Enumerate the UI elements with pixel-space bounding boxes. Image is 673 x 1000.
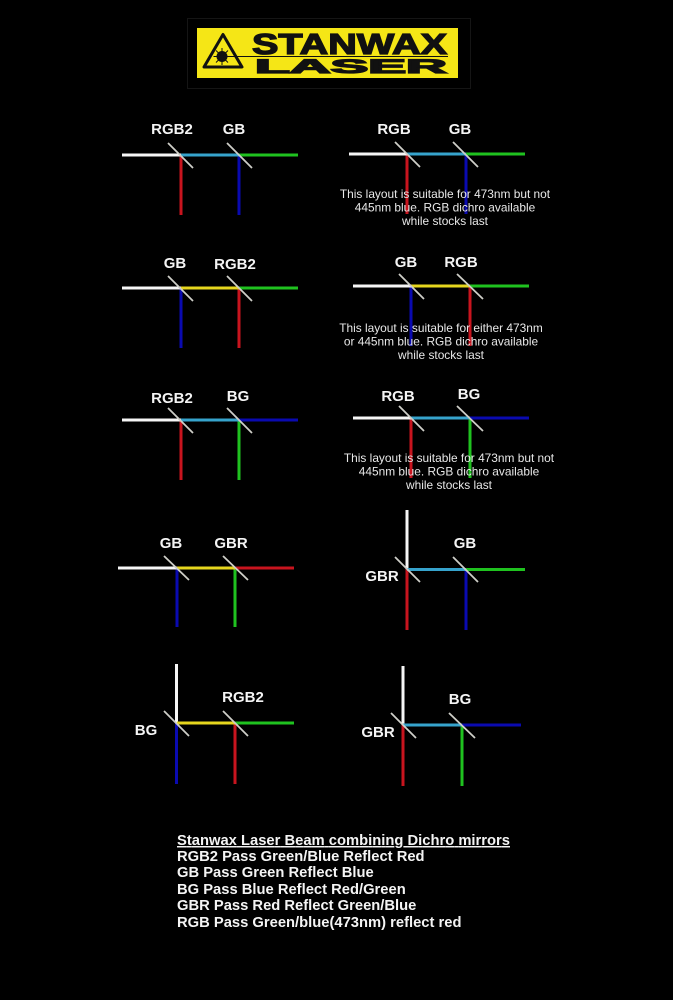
diagram: GB then RGB: RGB (444, 254, 478, 271)
note: 473nm only: This layout is suitable for 473nm but not (344, 451, 554, 465)
diagram: GB then RGB (353, 254, 529, 346)
diagram: GBR with vertical input then GB: GB (454, 535, 476, 552)
diagram: RGB then BG: BG (458, 386, 480, 403)
diagram: GBR with vertical input then GB (365, 510, 525, 630)
diagram: RGB then GB: RGB (377, 121, 411, 138)
note: either blue wavelength: This layout is suitable for either 473nm (339, 321, 543, 335)
key: dichro mirror list: BG Pass Blue Reflect Red/Green (177, 882, 406, 898)
diagram: BG with vertical input then RGB2 (135, 664, 294, 784)
diagram: RGB then GB: GB (449, 121, 471, 138)
diagram: RGB2 then BG: RGB2 (151, 390, 193, 407)
note: either blue wavelength: or 445nm blue. RGB dichro available (344, 334, 539, 348)
diagram: RGB then BG: RGB (381, 388, 415, 405)
note: 473nm only: 445nm blue. RGB dichro available (359, 464, 540, 478)
key: dichro mirror list: Stanwax Laser Beam combining Dichro mirrors (177, 833, 510, 849)
key: dichro mirror list: RGB2 Pass Green/Blue Reflect Red (177, 849, 425, 865)
note: 473nm only: This layout is suitable for 473nm but not (340, 187, 550, 201)
diagram: GB then GBR: GB (160, 535, 182, 552)
note: either blue wavelength: while stocks last (397, 348, 485, 362)
key: dichro mirror list: GB Pass Green Reflect Blue (177, 865, 374, 881)
diagram: RGB2 then GB: GB (223, 121, 245, 138)
diagram: BG with vertical input then RGB2: RGB2 (222, 689, 264, 706)
diagram: GBR with vertical input then BG: BG (449, 691, 471, 708)
logo: Stanwax Laser: LASER (255, 57, 448, 78)
key: dichro mirror list: RGB Pass Green/blue(473nm) reflect red (177, 915, 461, 931)
diagram: GB then RGB: GB (395, 254, 417, 271)
diagram: RGB then BG (353, 386, 529, 478)
note: 473nm only: while stocks last (401, 214, 489, 228)
diagram: BG with vertical input then RGB2: BG (135, 722, 157, 739)
diagram: GB then RGB2 (122, 255, 298, 348)
diagram: RGB2 then BG (122, 388, 298, 480)
key: dichro mirror list (177, 833, 510, 931)
diagram: RGB2 then GB: RGB2 (151, 121, 193, 138)
diagram: GB then RGB2: RGB2 (214, 256, 256, 273)
diagram: GB then RGB2: GB (164, 255, 186, 272)
diagram: GBR with vertical input then BG (361, 666, 521, 786)
diagram: GB then GBR: GBR (214, 535, 248, 552)
icon: laser warning triangle (204, 34, 242, 67)
diagram: GBR with vertical input then BG: GBR (361, 724, 395, 741)
note: 473nm only: 445nm blue. RGB dichro available (355, 200, 536, 214)
logo: Stanwax Laser (188, 18, 470, 88)
diagram: RGB2 then BG: BG (227, 388, 249, 405)
key: dichro mirror list: GBR Pass Red Reflect Green/Blue (177, 898, 416, 914)
diagram: GBR with vertical input then GB: GBR (365, 568, 399, 585)
logo: Stanwax Laser: STANWAX (252, 29, 448, 61)
diagram: RGB2 then GB (122, 121, 298, 215)
note: 473nm only: while stocks last (405, 478, 493, 492)
diagram: RGB then GB (349, 121, 525, 214)
diagram: GB then GBR (118, 535, 294, 627)
